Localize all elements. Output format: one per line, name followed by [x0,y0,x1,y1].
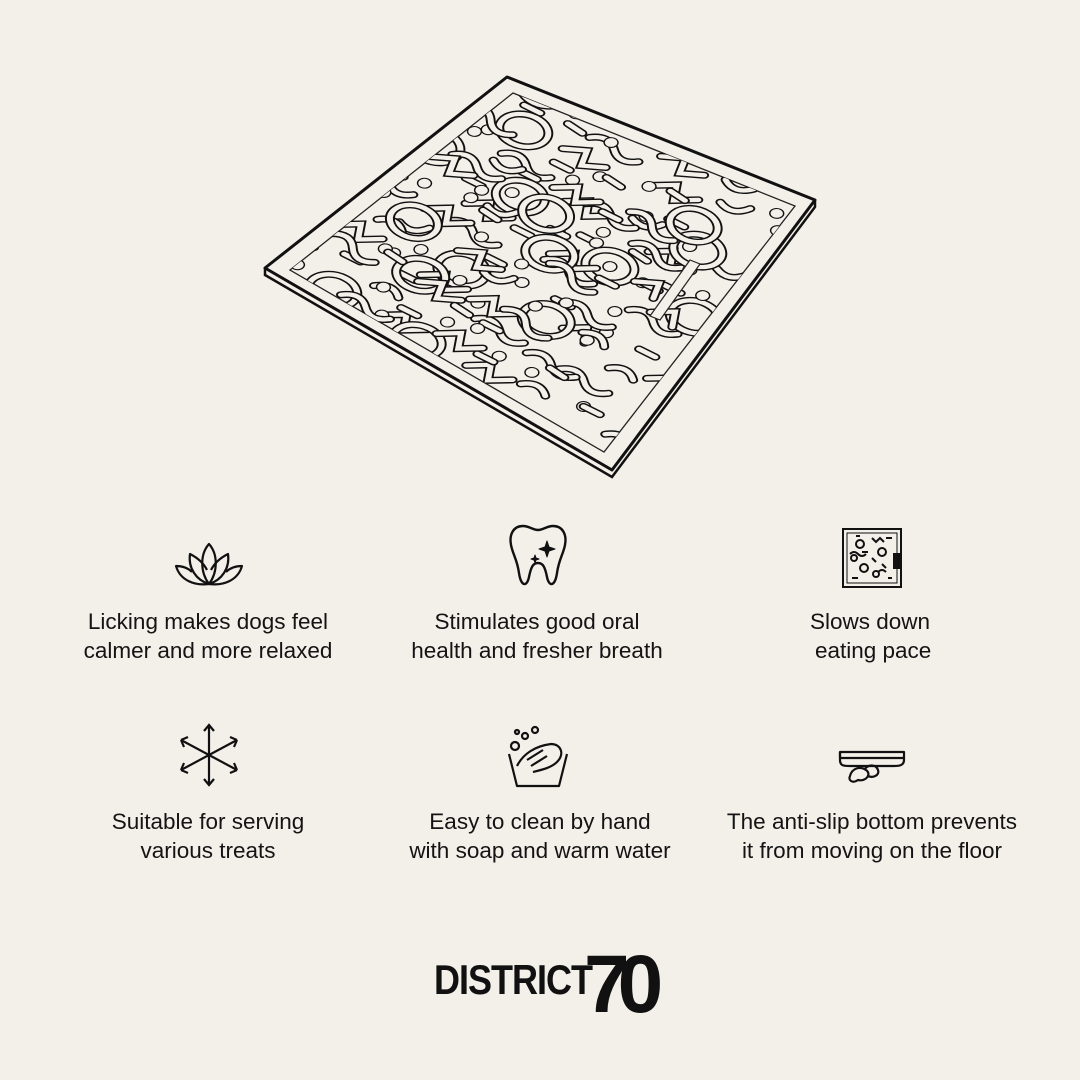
text: anti-slip: The anti-slip bottom prevents [727,809,1017,834]
icon: anti-slip bottom [838,750,906,783]
text: slows eating: Slows down [810,609,930,634]
icon: arrows [180,723,238,787]
icon: mat pattern [842,528,902,588]
text: various treats: various treats [140,838,276,863]
logo: District70: DISTRICT [434,956,592,1003]
icon: hand washing [508,726,568,788]
icon: lotus [174,542,244,586]
text: oral health: Stimulates good oral [434,609,640,634]
text: anti-slip: it from moving on the floor [742,838,1002,863]
text: oral health [411,609,663,663]
text: anti-slip [727,809,1017,863]
logo: District70 [434,939,660,1030]
text: easy to clean: with soap and warm water [409,838,671,863]
icon: tooth [509,524,567,586]
text: relaxed: calmer and more relaxed [84,638,332,663]
product illustration: lick mat [263,76,816,479]
text: slows eating: eating pace [815,638,931,663]
text: various treats [112,809,304,863]
text: relaxed: Licking makes dogs feel [88,609,328,634]
text: easy to clean: Easy to clean by hand [429,809,651,834]
text: slows eating [810,609,931,663]
text: relaxed [84,609,332,663]
logo: District70: 70 [584,939,651,1030]
text: oral health: health and fresher breath [411,638,663,663]
text: easy to clean [409,809,671,863]
text: various treats: Suitable for serving [112,809,304,834]
